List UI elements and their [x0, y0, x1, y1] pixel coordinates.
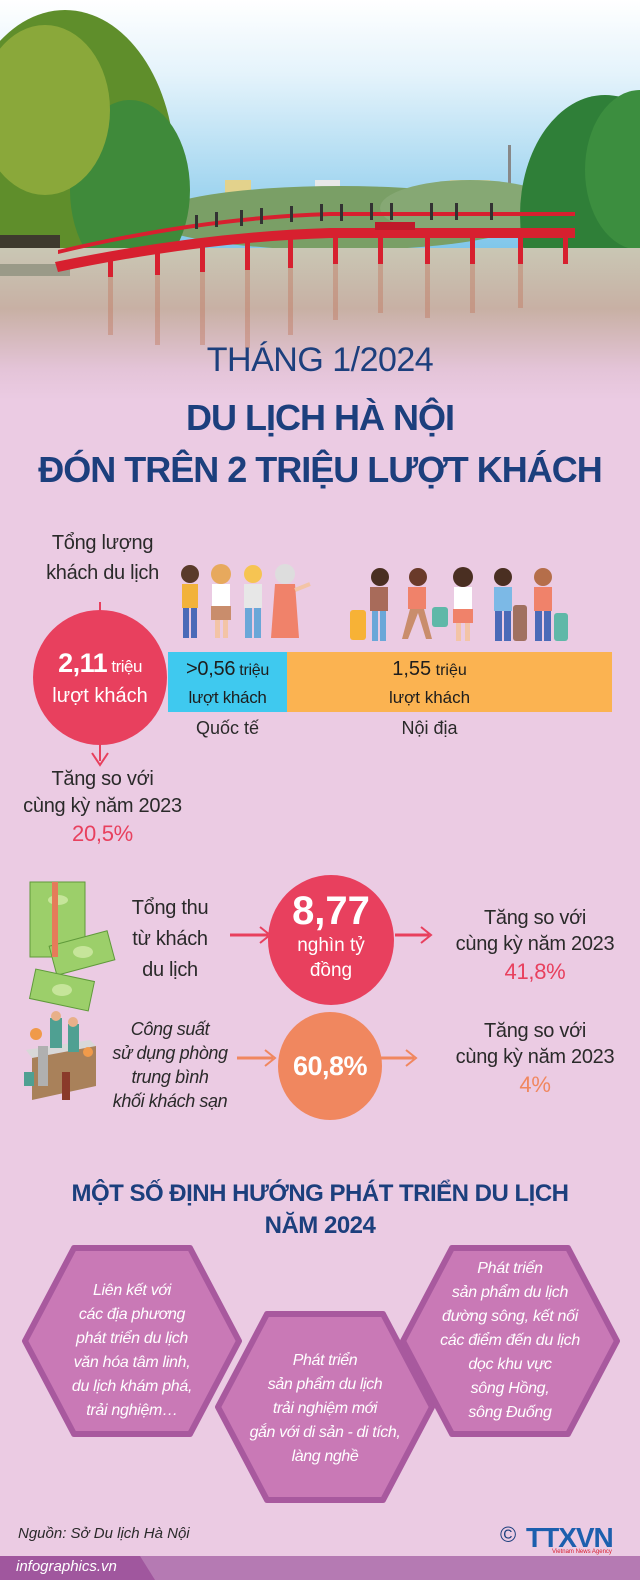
hexagon: experience products: trải nghiệm mới [273, 1400, 377, 1417]
title: month: THÁNG 1/2024 [207, 341, 433, 379]
background city [225, 180, 251, 215]
bar segment: domestic: lượt khách [389, 688, 470, 707]
circle: 2,11 million [33, 610, 167, 745]
hexagon: link with localities: Liên kết với [93, 1282, 171, 1299]
hexagon: river tourism: Phát triển [477, 1260, 543, 1277]
label: room occupancy: khối khách sạn [113, 1091, 227, 1111]
logo: TTXVN: © [500, 1522, 516, 1547]
label: Nội địa: Nội địa [401, 718, 458, 738]
label: total visitors: Tổng lượng [52, 532, 153, 554]
title: main headline [38, 397, 602, 490]
arrow: to revenue circle [230, 926, 268, 944]
footer text: infographics.vn [16, 1558, 117, 1575]
heading: development orientations 2024: NĂM 2024 [265, 1212, 375, 1239]
hexagon: experience products: gắn với di sản - di tích, [250, 1424, 400, 1441]
hexagon: link with localities: văn hóa tâm linh, [74, 1354, 190, 1371]
label: room occupancy: sử dụng phòng [112, 1043, 228, 1063]
text: growth 41.8%: cùng kỳ năm 2023 [456, 933, 614, 955]
hexagon: experience products: làng nghề [292, 1448, 358, 1465]
water [0, 248, 640, 400]
label: total revenue: từ khách [132, 928, 208, 950]
hexagon: link with localities: trải nghiệm… [86, 1402, 178, 1419]
bar: international vs domestic [168, 652, 612, 712]
circle: 60,8%: 60,8% [293, 1051, 367, 1081]
logo: TTXVN: TTXVN [526, 1522, 613, 1553]
logo: TTXVN: Vietnam News Agency [552, 1549, 612, 1555]
hexagon: river tourism: sông Hồng, [471, 1380, 549, 1397]
hexagon: river tourism: dọc khu vực [468, 1356, 552, 1373]
reflections [108, 258, 523, 348]
footer bar [0, 1556, 640, 1580]
bar segment: international [168, 652, 287, 712]
circle: 60,8% [278, 1012, 382, 1120]
title: main headline: ĐÓN TRÊN 2 TRIỆU LƯỢT KHÁCH [38, 449, 602, 490]
hexagon: experience products [215, 1311, 435, 1503]
hexagon: river tourism: sông Đuống [468, 1404, 552, 1421]
circle: 2,11 million: 2,11 triệu [58, 648, 142, 678]
text: growth 20.5%: Tăng so với [51, 768, 154, 790]
label: total visitors: khách du lịch [46, 562, 159, 584]
bar segment: domestic: 1,55 triệu [392, 658, 467, 680]
trees right [520, 95, 640, 335]
label: room occupancy: Công suất [131, 1019, 209, 1039]
label: Quốc tế: Quốc tế [196, 718, 259, 738]
bridge [55, 212, 575, 277]
source note: Nguồn: Sở Du lịch Hà Nội [18, 1525, 190, 1542]
icon: domestic tourists with luggage [350, 567, 568, 641]
hexagon: river tourism: các điểm đến du lịch [440, 1332, 580, 1349]
label: total revenue: Tổng thu [132, 897, 208, 919]
circle: 2,11 million: lượt khách [52, 685, 148, 707]
hexagon: link with localities: phát triển du lịch [76, 1330, 188, 1347]
circle: 8,77 trillion [268, 875, 394, 1005]
arrow: to occupancy circle [237, 1049, 276, 1067]
hexagon: link with localities: du lịch khám phá, [72, 1378, 192, 1395]
hexagon: link with localities: các địa phương [79, 1306, 185, 1323]
label: total revenue [132, 897, 208, 981]
text: growth 4%: cùng kỳ năm 2023 [456, 1046, 614, 1068]
heading: development orientations 2024: MỘT SỐ ĐỊNH HƯỚNG PHÁT TRIỂN DU LỊCH [71, 1180, 569, 1207]
text: growth 41.8% [456, 907, 614, 984]
label: room occupancy: trung bình [131, 1067, 209, 1087]
icon: international tourists [181, 564, 311, 638]
label: total revenue: du lịch [142, 959, 198, 981]
title: main headline: DU LỊCH HÀ NỘI [186, 397, 454, 438]
label: room occupancy [112, 1019, 228, 1111]
circle: 8,77 trillion: đồng [310, 960, 352, 981]
hexagon: experience products: sản phẩm du lịch [268, 1376, 382, 1393]
text: growth 20.5%: cùng kỳ năm 2023 [23, 795, 182, 817]
circle: 8,77 trillion: 8,77 [292, 889, 370, 933]
text: growth 20.5% [23, 768, 182, 846]
text: growth 41.8%: 41,8% [505, 959, 565, 984]
arrow: from occupancy circle [381, 1049, 418, 1067]
trees left [0, 10, 175, 330]
bar segment: domestic [287, 652, 612, 712]
hexagon: river tourism: sản phẩm du lịch [452, 1284, 568, 1301]
hexagon: river tourism: đường sông, kết nối [442, 1308, 578, 1325]
arrow: from revenue circle [395, 926, 432, 944]
hexagon: river tourism [400, 1245, 620, 1437]
text: growth 4%: 4% [519, 1072, 551, 1097]
bar segment: international: >0,56 triệu [186, 658, 269, 680]
hexagon: link with localities [22, 1245, 242, 1437]
circle: 8,77 trillion: nghìn tỷ [297, 935, 365, 956]
text: growth 20.5%: 20,5% [72, 821, 133, 846]
arrow: down to circle [99, 602, 101, 610]
bar segment: international: lượt khách [188, 688, 267, 707]
icon: hotel reception [24, 1011, 96, 1100]
heading: development orientations 2024 [71, 1179, 569, 1239]
icon: money stacks [29, 882, 116, 1012]
photo: Hoan Kiem lake with The Huc bridge [0, 0, 640, 378]
label: total visitors [46, 532, 159, 584]
text: growth 41.8%: Tăng so với [484, 907, 586, 929]
arrow: down from circle [91, 745, 109, 767]
text: growth 4%: Tăng so với [484, 1020, 586, 1042]
text: growth 4% [456, 1020, 614, 1097]
hexagon: experience products: Phát triển [293, 1352, 357, 1369]
